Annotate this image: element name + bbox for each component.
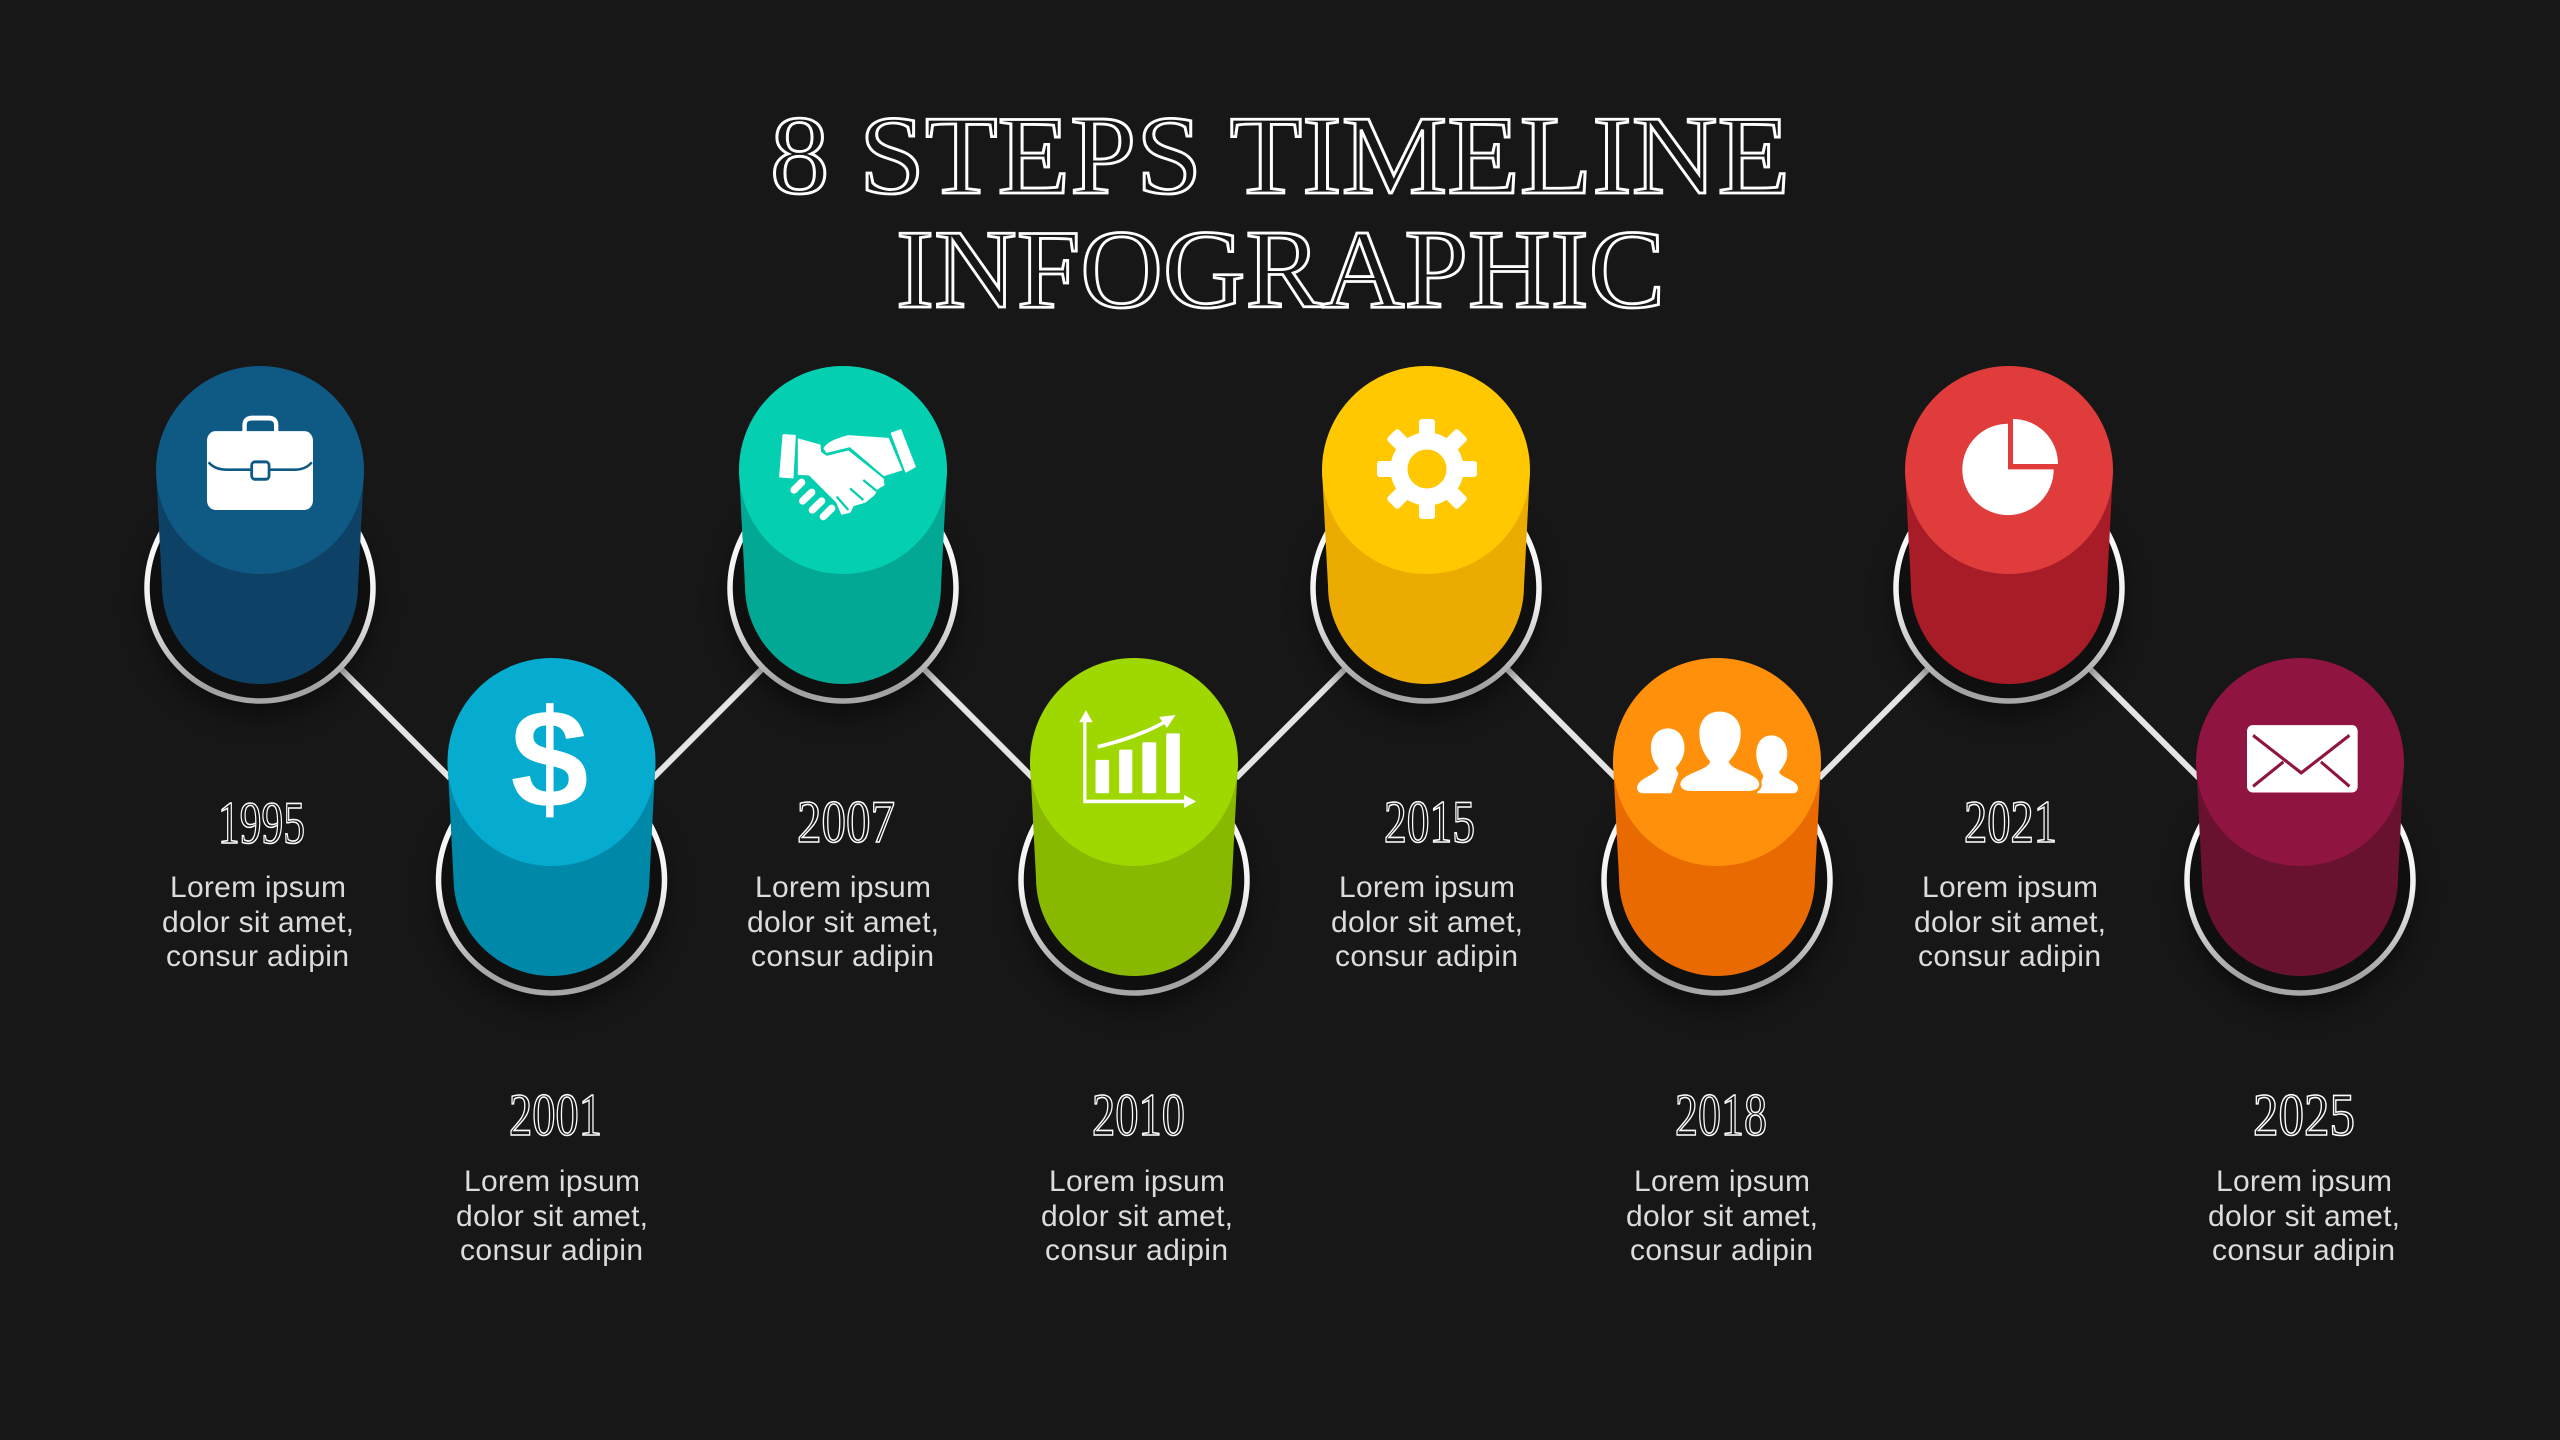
label: 2001: Lorem ipsum bbox=[464, 1165, 640, 1198]
label: 2001: consur adipin bbox=[460, 1234, 643, 1267]
label: 2015: consur adipin bbox=[1335, 940, 1518, 973]
step 2: 2001 cylinder bbox=[438, 658, 664, 1006]
label: 1995: Lorem ipsum bbox=[170, 871, 346, 904]
label: 2001 bbox=[456, 1082, 648, 1267]
label: 2010 bbox=[1041, 1082, 1233, 1267]
label: 2018 bbox=[1626, 1082, 1818, 1267]
label: 2007: 2007 bbox=[797, 789, 895, 855]
title: 8 STEPS TIMELINE bbox=[770, 94, 1790, 218]
label: 2021: 2021 bbox=[1964, 789, 2057, 855]
label: 2025: dolor sit amet, bbox=[2208, 1200, 2400, 1233]
step 6: 2018 cylinder bbox=[1604, 658, 1830, 1006]
label: 2018: Lorem ipsum bbox=[1634, 1165, 1810, 1198]
icon: bar chart bbox=[1079, 710, 1196, 808]
label: 2018: 2018 bbox=[1675, 1082, 1767, 1148]
label: 2025: consur adipin bbox=[2212, 1234, 2395, 1267]
icon: gear bbox=[1377, 419, 1477, 519]
step 5: 2015 cylinder bbox=[1313, 366, 1539, 714]
label: 2007: dolor sit amet, bbox=[747, 906, 939, 939]
step 1: 1995 cylinder bbox=[147, 366, 373, 714]
label: 2015: dolor sit amet, bbox=[1331, 906, 1523, 939]
icon: people bbox=[1637, 710, 1798, 793]
icon: pie chart bbox=[1962, 419, 2058, 515]
label: 1995 bbox=[162, 790, 354, 973]
title bbox=[770, 94, 1790, 332]
label: 2001: dolor sit amet, bbox=[456, 1200, 648, 1233]
label: 2015: Lorem ipsum bbox=[1339, 871, 1515, 904]
label: 2010: Lorem ipsum bbox=[1049, 1165, 1225, 1198]
icon: envelope bbox=[2247, 725, 2358, 792]
label: 2015: 2015 bbox=[1384, 789, 1475, 855]
label: 2007: consur adipin bbox=[751, 940, 934, 973]
label: 2025 bbox=[2208, 1082, 2400, 1267]
label: 2025: 2025 bbox=[2253, 1082, 2355, 1148]
label: 2015 bbox=[1331, 789, 1523, 973]
label: 2021: Lorem ipsum bbox=[1922, 871, 2098, 904]
label: 2021 bbox=[1914, 789, 2106, 973]
label: 1995: 1995 bbox=[218, 790, 305, 856]
label: 2010: consur adipin bbox=[1045, 1234, 1228, 1267]
label: 2007: Lorem ipsum bbox=[755, 871, 931, 904]
label: 2001: 2001 bbox=[509, 1082, 602, 1148]
label: 2018: dolor sit amet, bbox=[1626, 1200, 1818, 1233]
label: 2021: consur adipin bbox=[1918, 940, 2101, 973]
connector lines bbox=[341, 669, 2199, 778]
icon: handshake bbox=[780, 430, 915, 517]
label: 2010: 2010 bbox=[1092, 1082, 1185, 1148]
label: 2021: dolor sit amet, bbox=[1914, 906, 2106, 939]
icon: dollar sign: $ bbox=[511, 680, 588, 837]
label: 2007 bbox=[747, 789, 939, 973]
label: 2025: Lorem ipsum bbox=[2216, 1165, 2392, 1198]
step 4: 2010 cylinder bbox=[1021, 658, 1247, 1006]
step 8: 2025 cylinder bbox=[2187, 658, 2413, 1006]
icon: briefcase bbox=[207, 418, 313, 510]
label: 2010: dolor sit amet, bbox=[1041, 1200, 1233, 1233]
title: INFOGRAPHIC bbox=[896, 208, 1665, 332]
label: 1995: consur adipin bbox=[166, 940, 349, 973]
step 7: 2021 cylinder bbox=[1896, 366, 2122, 714]
step 3: 2007 cylinder bbox=[730, 366, 956, 714]
label: 1995: dolor sit amet, bbox=[162, 906, 354, 939]
label: 2018: consur adipin bbox=[1630, 1234, 1813, 1267]
